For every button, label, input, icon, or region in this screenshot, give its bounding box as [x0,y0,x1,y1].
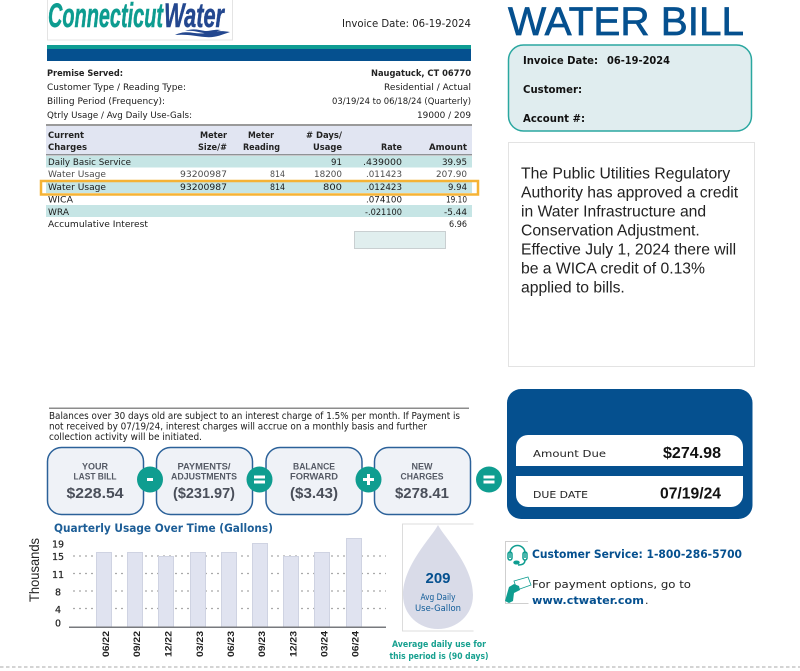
row: water usage tier 2 highlighted: 814 [270,183,285,193]
average daily use caption: Average daily use for [392,640,486,650]
card: new charges: $278.41 [395,485,449,502]
card: payments and adjustments [156,448,252,514]
icon: payment card in hand [505,577,531,603]
amount due row: Amount Due [533,449,606,460]
row: water usage tier 2 highlighted: 93200987 [180,183,227,193]
card: payments and adjustments: PAYMENTS/ [178,462,231,472]
card: balance forward [266,448,362,514]
x axis labels: 09/22 [132,631,142,657]
late payment disclaimer: collection activity will be initiated. [49,432,202,443]
row: water usage tier 1: 207.90 [436,170,467,180]
x axis labels: 06/23 [226,631,236,657]
icon: water drop average daily use: 209 [426,570,450,587]
due date row: 07/19/24 [660,486,721,502]
table header: Meter [248,131,274,141]
row: water usage tier 1: Water Usage [48,170,106,180]
panel: account info: Account #: [523,112,585,125]
panel: WICA credit notice: The Public Utilities Regulatory [521,166,730,182]
row: WICA [48,196,467,206]
panel: account info: 06-19-2024 [607,54,670,67]
x axis labels: 03/24 [320,631,330,657]
y axis labels: 4 [55,605,61,616]
table header: # Days/ [306,131,343,141]
card: new charges [374,448,470,514]
average daily use caption: this period is (90 days) [390,652,488,662]
row: water usage tier 1: 93200987 [180,170,227,180]
row: water usage tier 2 highlighted: 9.94 [448,183,467,193]
amount due row: $274.98 [663,445,721,462]
premise and billing details [47,69,471,121]
row: water usage tier 2 highlighted: 800 [323,183,342,193]
payment options text: www.ctwater.com [532,594,644,607]
late payment disclaimer: not received by 07/19/24, interest charges will accrue on a monthly basis and further [49,422,427,432]
row: water usage tier 1: 18200 [314,170,342,180]
row: water usage tier 1: .011423 [366,170,402,180]
y axis labels: 8 [55,588,61,598]
balance equation [48,448,502,514]
card: balance forward: BALANCE [293,462,335,472]
icon: water drop average daily use: Use-Gallon [415,604,461,614]
y axis labels: 0 [55,618,61,630]
row: water usage tier 2 highlighted: .012423 [366,183,402,193]
row: accumulative interest: 6.96 [449,220,467,230]
row: daily basic service: Daily Basic Service [48,158,131,168]
panel: WICA credit notice: in Water Infrastructure and [521,204,706,220]
card: payments and adjustments: ADJUSTMENTS [171,472,237,482]
row: WRA: -5.44 [444,208,467,218]
icon: water drop average daily use [402,524,474,631]
invoice date header: Invoice Date: 06-19-2024 [342,17,471,30]
premise and billing details: Qtrly Usage / Avg Daily Use-Gals: [47,111,192,121]
icon: water drop average daily use: Avg Daily [420,593,456,603]
small total box [354,232,446,248]
x axis labels: 12/22 [164,631,174,657]
late payment disclaimer [49,408,469,443]
highlight outline on water usage row [41,181,478,194]
card: your last bill: $228.54 [66,485,124,502]
header colour band [47,45,471,61]
y axis labels: 11 [52,570,64,581]
row: WICA: .074100 [366,196,402,206]
y axis labels: 15 [52,552,64,563]
payment options text: . [645,594,648,607]
panel: WICA credit notice: Conservation Adjustment. [521,222,700,240]
payment options text: For payment options, go to [532,578,691,591]
panel: WICA credit notice [508,142,754,366]
due date row: DUE DATE [533,490,588,501]
table header: Size/# [198,143,227,153]
x axis labels [101,631,360,657]
row: water usage tier 1: 814 [270,170,285,180]
late payment disclaimer: Balances over 30 days old are subject to an interest charge of 1.5% per month. If Payment is [49,411,460,422]
row: water usage tier 2 highlighted: Water Usage [48,183,106,193]
row: WRA [46,205,472,218]
x axis labels: 06/24 [350,631,360,657]
panel: account info [508,45,752,131]
x axis labels: 12/23 [288,631,298,657]
card: balance forward: ($3.43) [290,485,338,502]
table header: Meter [200,131,228,141]
title: water bill: WATER BILL [508,0,744,44]
table header: Usage [313,143,342,153]
panel: account info: Customer: [523,83,582,96]
panel: WICA credit notice: Authority has approved a credit [521,184,739,202]
row: WICA: 19.10 [446,196,467,206]
y axis title: Thousands [27,538,42,602]
operator: equals total [476,466,502,492]
panel: WICA credit notice: be a WICA credit of 0.13% [521,260,705,278]
card: your last bill: LAST BILL [74,472,117,482]
operator: minus [137,466,163,492]
premise and billing details: Customer Type / Reading Type: [47,83,186,93]
row: daily basic service: 39.95 [442,158,467,168]
premise and billing details: 03/19/24 to 06/18/24 (Quarterly) [332,97,471,107]
payment options text [532,578,691,607]
due date row [516,476,743,507]
card: your last bill [48,448,144,514]
operator: equals [246,466,272,492]
chart title: Quarterly Usage Over Time (Gallons) [54,521,273,535]
premise and billing details: Naugatuck, CT 06770 [371,69,471,79]
premise and billing details: Residential / Actual [384,83,471,93]
table header: Charges [48,143,87,153]
table header: Amount [429,143,468,153]
table header: Current [48,131,85,141]
card: new charges: NEW [412,462,433,472]
panel: amount due [507,389,752,519]
premise and billing details: 19000 / 209 [417,111,471,121]
premise and billing details: Billing Period (Frequency): [47,97,165,107]
premise and billing details: Premise Served: [47,69,123,79]
row: WICA: WICA [48,196,74,206]
row: daily basic service [46,156,472,168]
row: daily basic service: 91 [331,158,342,168]
charges table [46,124,472,248]
row: water usage tier 2 highlighted [46,181,472,193]
panel: WICA credit notice: Effective July 1, 2024 there will [521,242,736,258]
bars [96,538,362,627]
row: daily basic service: .439000 [363,158,402,168]
x axis labels: 09/23 [257,631,267,657]
card: your last bill: YOUR [82,462,108,472]
amount due row [516,435,743,466]
average daily use caption [390,640,488,662]
y axis labels: 19 [52,540,64,550]
operator: plus [356,466,382,492]
y axis labels [52,540,64,630]
row: water usage tier 1 [48,170,467,180]
x axis labels: 03/23 [195,631,205,657]
row: accumulative interest [48,220,467,230]
panel: WICA credit notice: applied to bills. [521,280,625,296]
table header: Rate [381,143,402,153]
x axis labels: 06/22 [101,631,111,657]
card: payments and adjustments: ($231.97) [173,485,235,502]
row: accumulative interest: Accumulative Interest [48,220,148,230]
table header [46,124,472,156]
icon: headset [506,542,528,604]
row: WRA: WRA [48,208,70,218]
row: WRA: -.021100 [365,208,402,218]
bar chart: quarterly usage [27,538,386,657]
card: balance forward: FORWARD [290,472,339,482]
customer service phone: Customer Service: 1-800-286-5700 [532,547,742,561]
panel: account info: Invoice Date: [523,54,598,67]
card: new charges: CHARGES [400,472,444,482]
table header: Reading [243,143,280,153]
